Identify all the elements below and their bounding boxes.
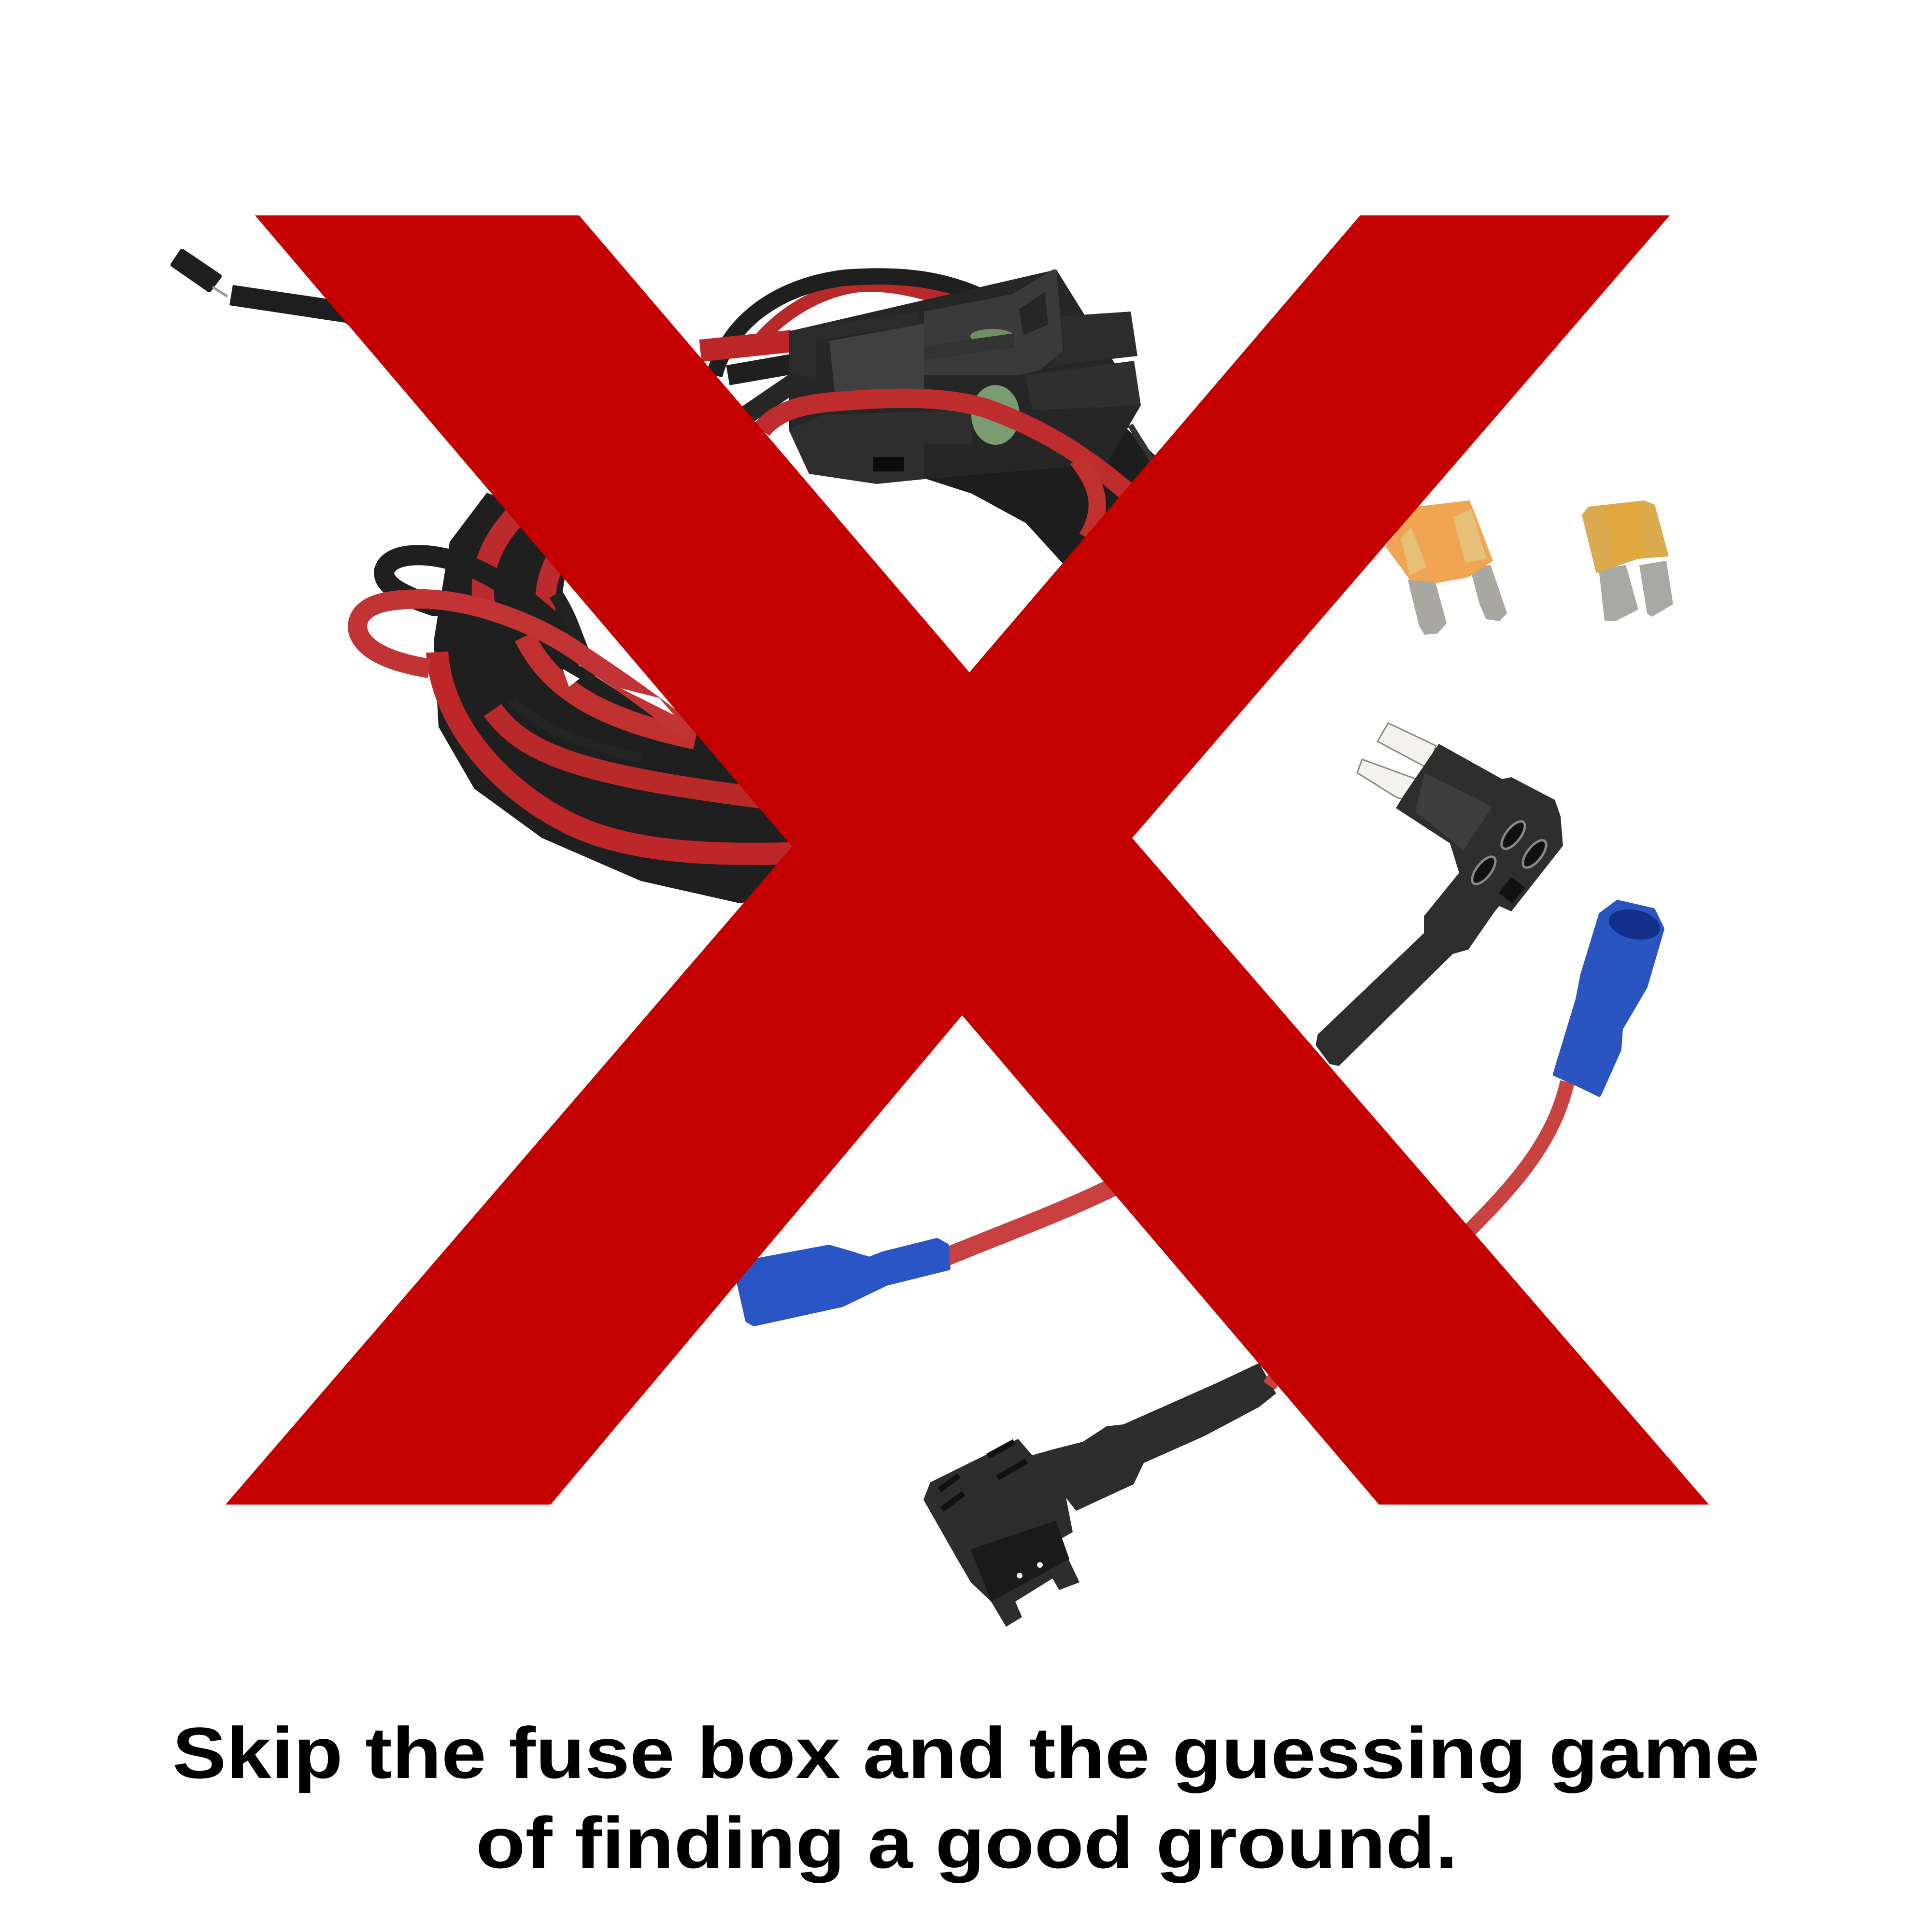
red wire to top blue terminal — [1459, 1082, 1567, 1241]
caption — [172, 1712, 1760, 1883]
icon: upper fuse tap — [1316, 723, 1563, 1066]
wiring harness: coil and connector — [173, 251, 1159, 903]
icon: orange mini fuse — [1385, 500, 1506, 634]
wire coil — [357, 493, 811, 903]
red wire to left blue terminal — [942, 1183, 1121, 1259]
icon: lower fuse tap — [923, 1363, 1278, 1627]
icon: top blue terminal — [1555, 902, 1663, 1095]
icon: amber micro fuse — [1582, 500, 1673, 621]
caption line 2: of finding a good ground. — [476, 1802, 1458, 1883]
cut wire end at top left — [173, 251, 382, 338]
connector housing — [789, 270, 1141, 484]
big red X — [226, 215, 1709, 1505]
upper wires behind connector — [700, 276, 1159, 568]
icon: left blue terminal — [739, 1240, 949, 1324]
red wire over connector — [762, 398, 1125, 538]
caption line 1: Skip the fuse box and the guessing game — [172, 1712, 1760, 1793]
